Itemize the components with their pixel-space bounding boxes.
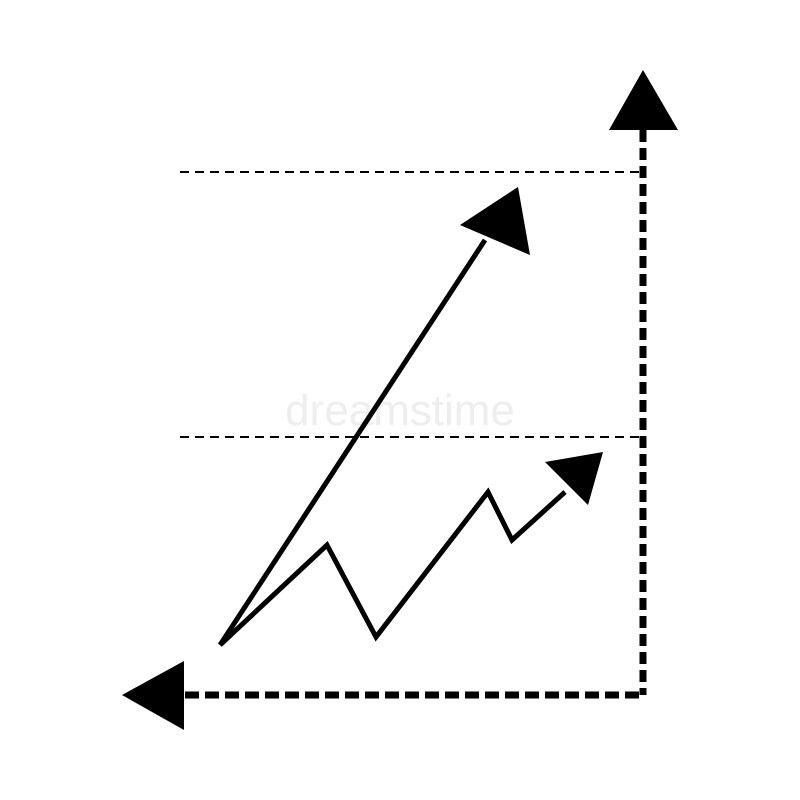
zigzag growth arrow (220, 452, 603, 645)
icon: left arrow head (122, 661, 184, 730)
dashed guide lines (180, 172, 640, 437)
icon: up arrow head (609, 70, 678, 130)
vertical axis (609, 70, 678, 695)
horizontal axis (122, 661, 643, 730)
straight growth arrow (220, 187, 530, 645)
watermark: dreamstime (285, 386, 515, 435)
